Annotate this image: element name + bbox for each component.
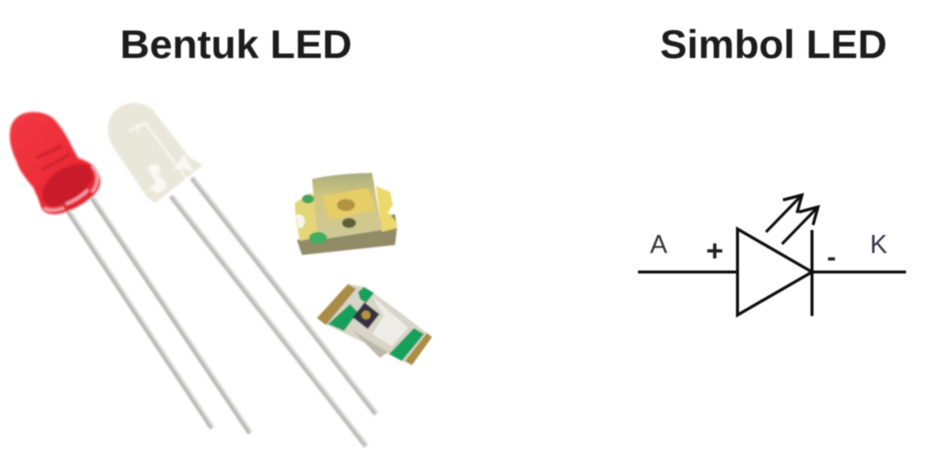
- red LED leads: [66, 198, 251, 433]
- red LED rim highlight: [44, 166, 97, 210]
- icon: red through-hole LED: [10, 112, 251, 433]
- red LED body: [10, 112, 100, 214]
- icon: clear through-hole LED: [108, 103, 377, 446]
- SMD base: [297, 214, 397, 255]
- SMD chip: [353, 302, 379, 329]
- label: minus: -: [827, 242, 836, 272]
- SMD lens highlight: [372, 296, 408, 346]
- arrow: light ray 2: [782, 207, 818, 244]
- label: K: K: [870, 229, 888, 259]
- SMD right gold terminal: [405, 333, 432, 365]
- SMD right terminal: [376, 186, 397, 232]
- title: Bentuk LED: Bentuk LED: [120, 23, 352, 67]
- anode wire: [638, 270, 737, 274]
- SMD green marks: [302, 194, 314, 204]
- cathode wire: [812, 270, 906, 274]
- cathode bar: [810, 230, 814, 316]
- label: A: A: [650, 229, 668, 259]
- SMD left terminal: [295, 193, 322, 241]
- diagram: LED schematic symbol: [638, 195, 906, 316]
- clear LED body: [108, 103, 203, 203]
- red LED opening: [42, 164, 92, 206]
- clear LED leads: [171, 178, 377, 446]
- SMD green bands: [328, 304, 358, 331]
- SMD lens: [312, 173, 382, 240]
- icon: top SMD LED: [295, 173, 397, 255]
- icon: bottom SMD LED: [317, 284, 432, 365]
- SMD left gold terminal: [317, 284, 356, 325]
- label: plus: +: [706, 235, 724, 268]
- arrow: light ray 1: [766, 195, 802, 232]
- red LED folds: [36, 146, 70, 170]
- SMD die: [337, 199, 355, 211]
- clear LED internal frame: [129, 123, 186, 178]
- diode triangle: [738, 229, 812, 315]
- title: Simbol LED: Simbol LED: [660, 23, 887, 67]
- SMD board: [317, 284, 432, 365]
